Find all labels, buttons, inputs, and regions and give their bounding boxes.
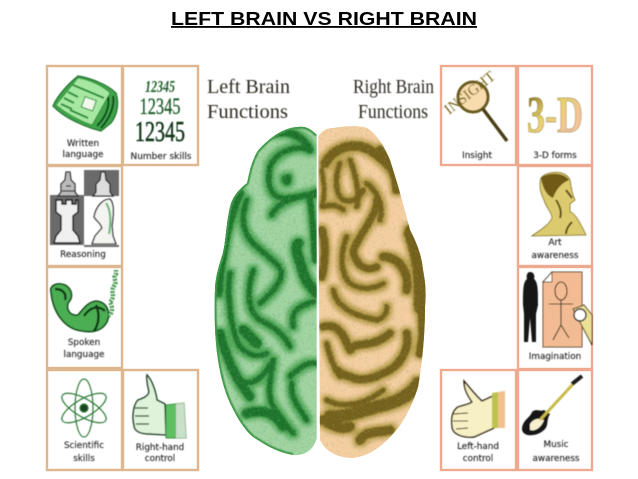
- panel frames: left functions: [47, 66, 198, 470]
- panel labels: Art: [548, 238, 562, 248]
- panel labels: control: [463, 454, 493, 464]
- panel labels: Music: [543, 440, 569, 450]
- icon: telephone: [51, 270, 116, 332]
- panel labels: Number skills: [130, 152, 192, 162]
- panel frames: right functions: [441, 66, 592, 470]
- panel labels: Imagination: [529, 352, 581, 362]
- panel labels: [60, 139, 581, 464]
- heading: left brain functions: Functions: [207, 101, 288, 123]
- heading: left brain functions: [207, 76, 290, 123]
- icon: 3-D letters: 3-D: [527, 87, 583, 144]
- panel labels: Spoken: [68, 338, 100, 348]
- icon: numbers: 12345: [135, 116, 185, 148]
- panel labels: Insight: [462, 151, 492, 161]
- icon: numbers: 12345: [140, 94, 180, 119]
- panel labels: awareness: [533, 454, 580, 464]
- icon: newspaper: [53, 76, 118, 131]
- panel labels: Scientific: [64, 441, 104, 451]
- panel labels: 3-D forms: [533, 151, 577, 161]
- panel labels: skills: [73, 454, 95, 464]
- icon: statue bust: [532, 172, 586, 236]
- icon: magnifying glass insight: [442, 69, 507, 141]
- icon: right hand thumbs up: [133, 375, 186, 438]
- panel labels: awareness: [532, 251, 579, 261]
- icon: electric guitar: [522, 376, 582, 435]
- heading: right brain functions: Functions: [358, 101, 428, 123]
- icon: numbers: 12345: [145, 77, 175, 96]
- panel labels: Right-hand: [136, 443, 184, 453]
- heading: left brain functions: Left Brain: [207, 76, 290, 98]
- panel labels: Reasoning: [60, 250, 106, 260]
- panel labels: language: [64, 350, 104, 360]
- icon: atom: [58, 379, 110, 437]
- panel labels: Left-hand: [457, 442, 499, 452]
- icon: magnifying glass insight: INSIGHT: [442, 69, 499, 118]
- brain: central fissure: [316, 130, 318, 445]
- brain: right hemisphere: [318, 115, 430, 465]
- panel labels: control: [145, 454, 175, 464]
- icon: numbers: [135, 77, 185, 148]
- heading: right brain functions: Right Brain: [353, 76, 434, 98]
- brain: left hemisphere: [214, 126, 317, 456]
- brain: [214, 126, 426, 458]
- icon: chess pieces: [50, 170, 119, 247]
- panel labels: Written: [67, 139, 99, 149]
- heading: right brain functions: [353, 76, 434, 123]
- icon: imagination figure and drawing: [523, 272, 592, 347]
- panel labels: language: [63, 150, 103, 160]
- icon: left hand thumbs up: [452, 381, 505, 437]
- title: LEFT BRAIN VS RIGHT BRAIN: [171, 8, 477, 29]
